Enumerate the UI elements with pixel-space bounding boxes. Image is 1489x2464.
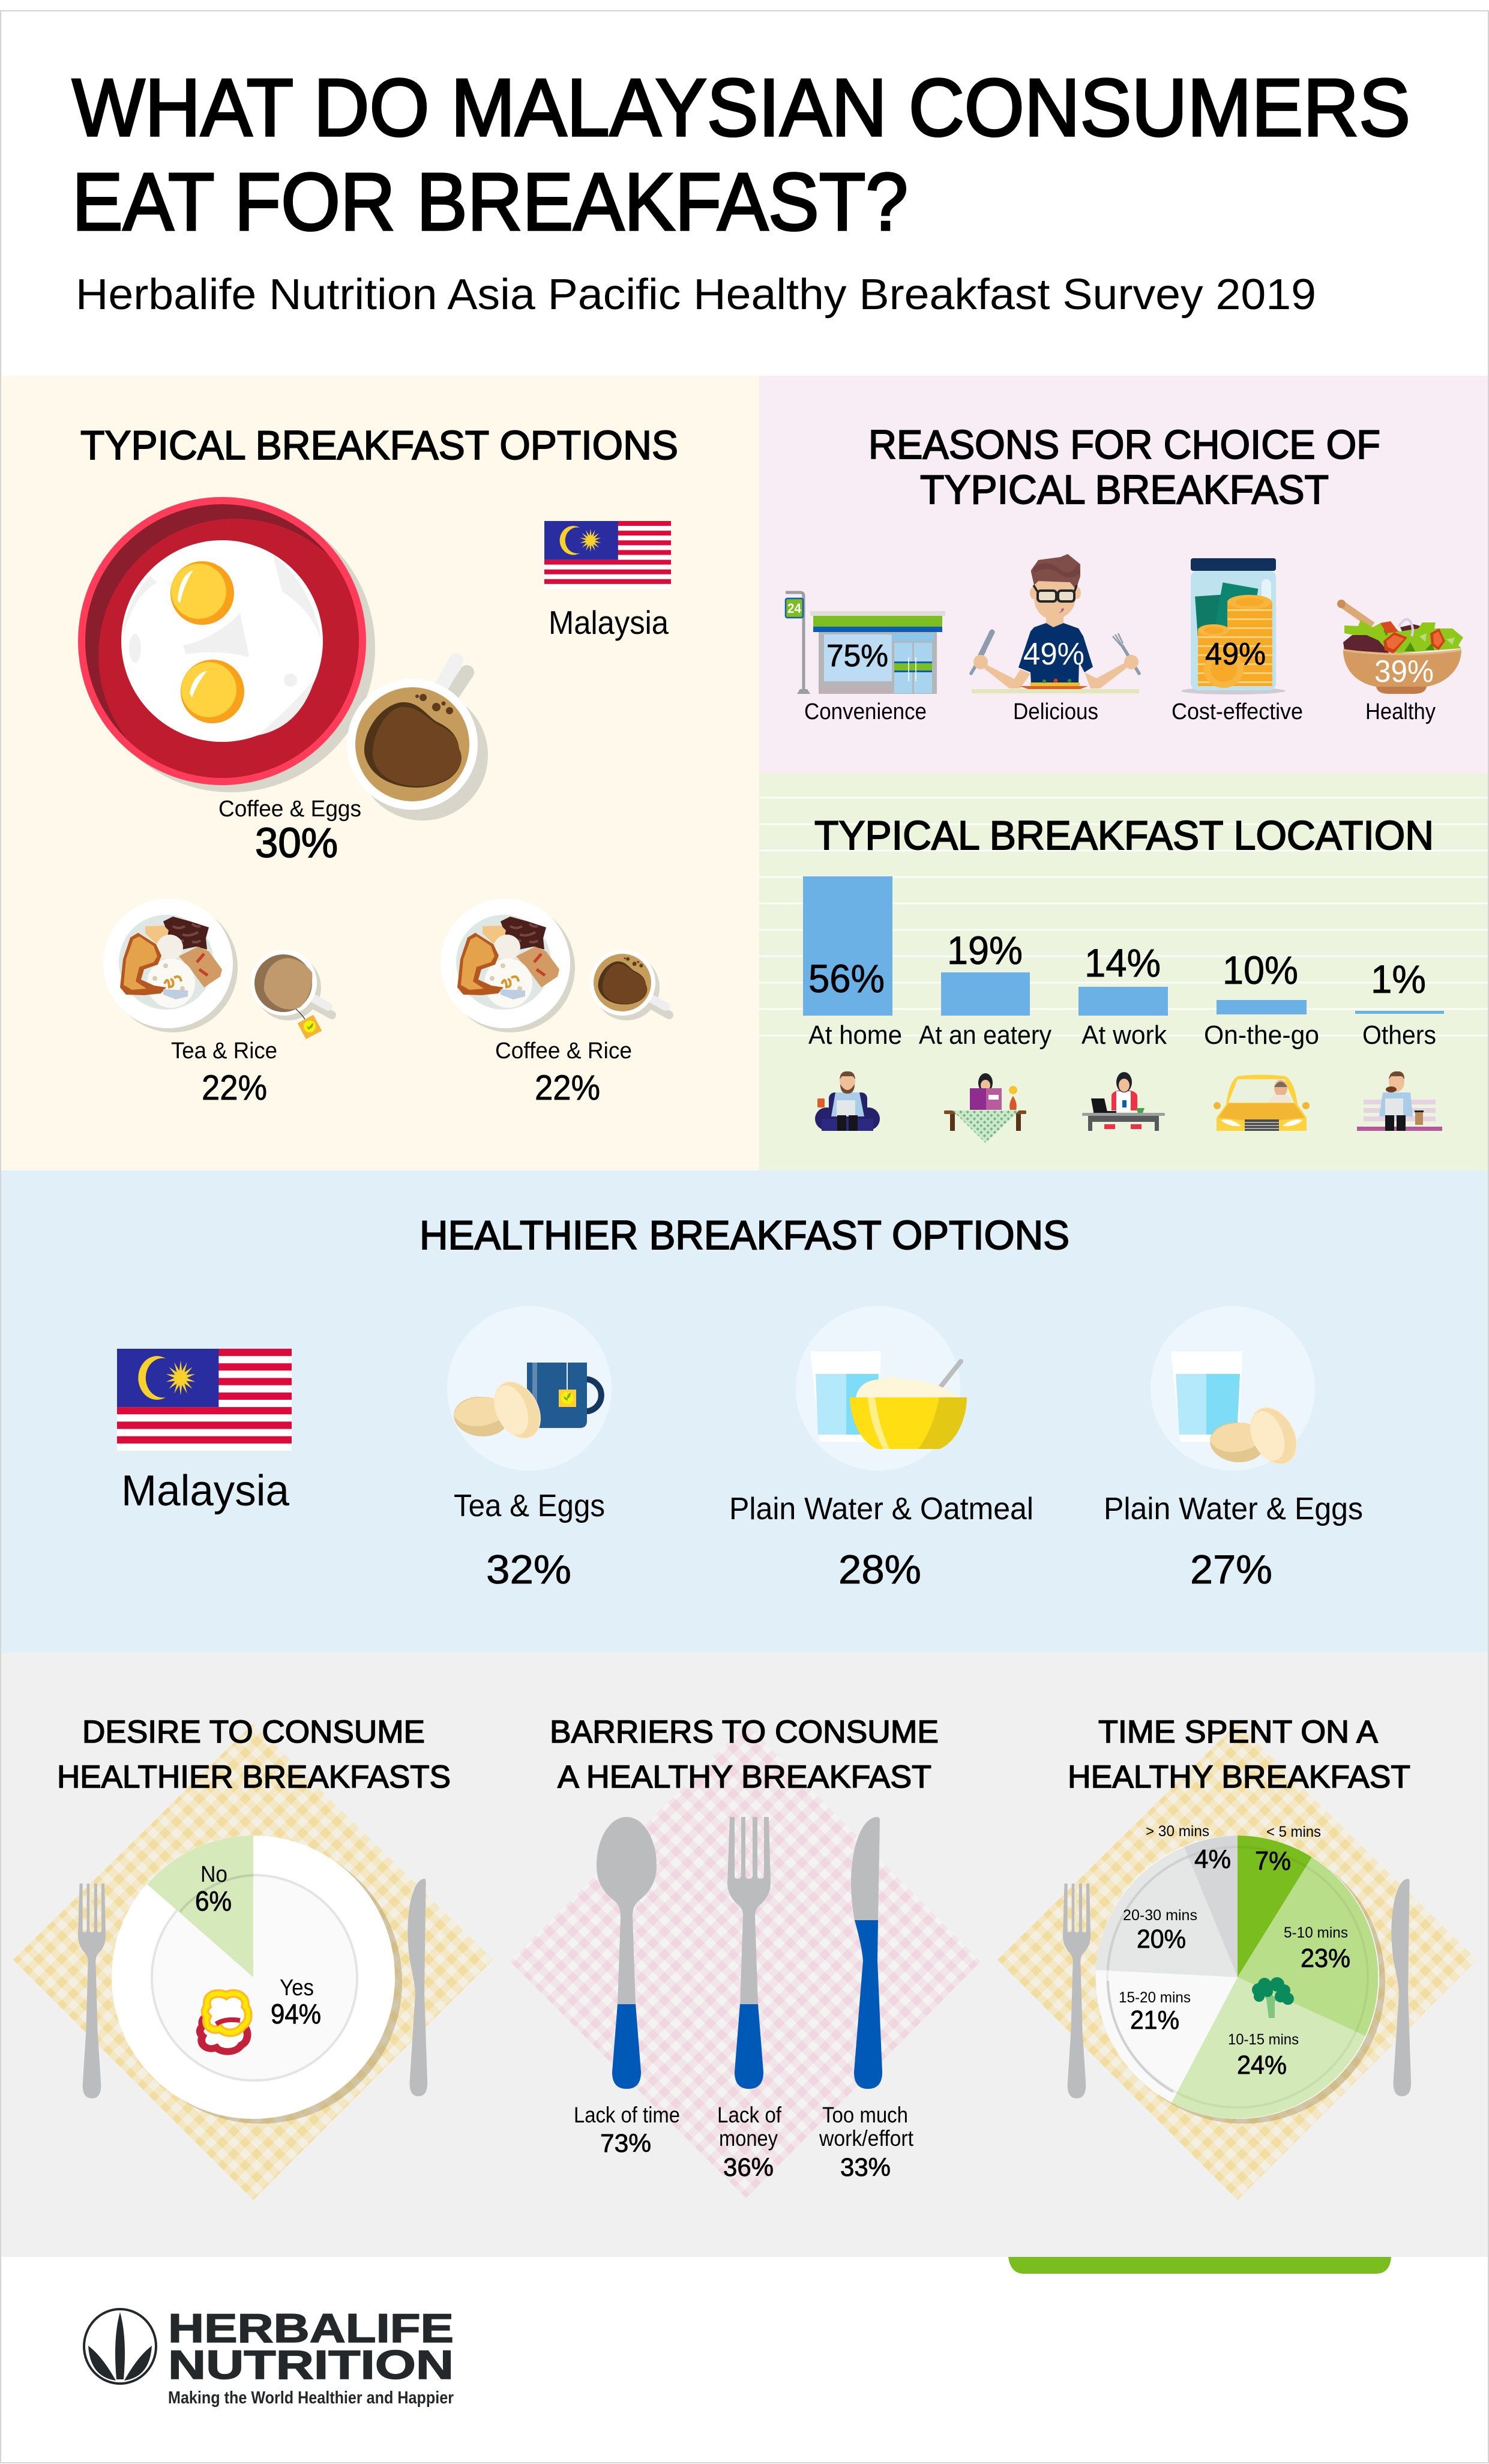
icon: plate of fried eggs (78, 497, 375, 792)
icon: convenience store: 24 (787, 601, 802, 616)
label: lack of time: Lack of time (574, 2103, 680, 2127)
label: plain water and oatmeal: Plain Water & Oatmeal (729, 1492, 1033, 1526)
bar chart: location: 1% (1371, 957, 1426, 1001)
icon: tea and eggs (447, 1306, 612, 1471)
heading: location: TYPICAL BREAKFAST LOCATION (814, 813, 1434, 858)
panel: reasons for choice (759, 376, 1488, 773)
value: tea and eggs: 32% (486, 1547, 571, 1592)
heading: barriers: BARRIERS TO CONSUME (550, 1714, 939, 1750)
heading: desire (57, 1714, 451, 1795)
panel: typical breakfast options (1, 376, 759, 1170)
pie chart: time spent: > 30 mins (1146, 1823, 1209, 1840)
pie chart: time spent: 4% (1194, 1845, 1231, 1874)
value: coffee and eggs: 30% (255, 819, 338, 866)
icon: bell pepper rings (200, 1993, 248, 2052)
icon: coffee and rice meal (441, 899, 669, 1032)
placemat: barriers (510, 1723, 981, 2198)
icon: tea and rice meal (103, 899, 332, 1039)
value: healthy: 39% (1374, 654, 1434, 689)
bar chart: location: 10% (1223, 948, 1298, 992)
label: lack of money (717, 2103, 782, 2182)
icon: knife right of plate (408, 1879, 427, 2096)
icon: coffee cup (347, 660, 488, 821)
icon: knife too much work (851, 1817, 882, 2089)
pie chart: desire yes or no: Yes (280, 1975, 314, 2001)
heading: typical breakfast options: TYPICAL BREAKFAST OPTIONS (80, 423, 678, 468)
label: too much work: Too much (822, 2103, 908, 2127)
heading: healthier options: HEALTHIER BREAKFAST OPTIONS (420, 1212, 1069, 1258)
label: Malaysia: Malaysia (549, 604, 669, 641)
label: coffee and eggs: Coffee & Eggs (218, 797, 361, 822)
icon: woman at work desk (1082, 1072, 1165, 1131)
icon: convenience store (786, 592, 945, 694)
icon: Malaysian flag (544, 521, 671, 589)
label: cost-effective: Cost-effective (1172, 699, 1303, 724)
heading: desire: HEALTHIER BREAKFASTS (57, 1759, 451, 1795)
subtitle: Herbalife Nutrition Asia Pacific Healthy Breakfast Survey 2019 (76, 271, 1316, 319)
value: delicious: 49% (1023, 637, 1084, 672)
pie chart: time spent: 20% (1137, 1924, 1186, 1954)
logo emblem (84, 2309, 156, 2384)
bar chart: location: On-the-go (1204, 1020, 1319, 1050)
icon: broccoli (1252, 1977, 1294, 2018)
heading: time spent: TIME SPENT ON A (1098, 1714, 1379, 1750)
pie chart: time spent: 20-30 mins (1123, 1907, 1197, 1924)
green tab (1008, 2257, 1391, 2274)
label: lack of money: money (719, 2126, 778, 2151)
label: plain water and eggs: Plain Water & Eggs (1104, 1492, 1363, 1526)
bar chart: location: At home (808, 1020, 902, 1050)
pie chart: desire yes or no (112, 1836, 402, 2124)
pie chart: desire yes or no: 6% (195, 1885, 232, 1917)
value: convenience: 75% (826, 639, 888, 673)
icon: jar of coins (1181, 558, 1286, 694)
pie chart: time spent: 5-10 mins (1284, 1924, 1348, 1941)
value: tea and rice: 22% (202, 1068, 267, 1107)
title: WHAT DO MALAYSIAN CONSUMERS (72, 62, 1410, 153)
value: plain water and oatmeal: 28% (838, 1547, 921, 1592)
icon: spoon lack of time (597, 1817, 657, 2089)
label: convenience: Convenience (804, 699, 927, 724)
bar chart: location: 14% (1084, 941, 1161, 985)
icon: salad bowl (1337, 600, 1463, 694)
heading: barriers: A HEALTHY BREAKFAST (558, 1759, 931, 1795)
icon: plain water and eggs (1151, 1306, 1315, 1472)
heading: time spent (1068, 1714, 1410, 1795)
label: lack of money: 36% (723, 2153, 774, 2182)
value: coffee and rice: 22% (535, 1068, 600, 1107)
bar chart: location: 56% (808, 956, 885, 1001)
label: Malaysia large: Malaysia (121, 1467, 290, 1515)
pie chart: time spent: 7% (1255, 1846, 1291, 1876)
heading: desire: DESIRE TO CONSUME (82, 1714, 425, 1750)
icon: man in armchair at home (815, 1071, 880, 1131)
icon: man on bench (1357, 1071, 1442, 1131)
pie chart: time spent (1096, 1823, 1385, 2124)
label: delicious: Delicious (1013, 699, 1098, 724)
panel: bottom section background (1, 1652, 1488, 2257)
pie chart: time spent: 15-20 mins (1119, 1989, 1191, 2006)
label: tea and eggs: Tea & Eggs (454, 1489, 605, 1523)
logo: Herbalife Nutrition: NUTRITION (168, 2342, 454, 2388)
panel: healthier breakfast options (1, 1170, 1488, 1652)
icon: driver in car (1214, 1074, 1310, 1131)
bar chart: location (803, 876, 1444, 1050)
heading: time spent: HEALTHY BREAKFAST (1068, 1759, 1410, 1795)
icon: fork lack of money (727, 1817, 771, 2089)
heading: reasons for choice: TYPICAL BREAKFAST (920, 467, 1329, 513)
label: too much work: work/effort (819, 2126, 914, 2151)
bar chart: location: 19% (947, 928, 1023, 972)
label: tea and rice: Tea & Rice (171, 1038, 277, 1064)
pie chart: desire yes or no: No (200, 1862, 227, 1887)
pie chart: time spent: 23% (1301, 1944, 1350, 1973)
icon: woman with menu at eatery (944, 1073, 1026, 1143)
icon: Malaysian flag large (117, 1349, 292, 1451)
pie chart: time spent: < 5 mins (1266, 1824, 1321, 1840)
value: cost-effective: 49% (1205, 637, 1266, 672)
bar chart: location: At work (1081, 1020, 1167, 1050)
placemat: time spent (997, 1723, 1477, 2200)
icon: fork left of pie (1063, 1884, 1090, 2098)
icon: man eating (971, 554, 1139, 693)
icon: knife right of pie (1391, 1879, 1411, 2096)
label: lack of time: 73% (600, 2129, 651, 2158)
label: too much work (819, 2103, 914, 2182)
pie chart: time spent: 24% (1237, 2050, 1287, 2080)
pie chart: desire yes or no: 94% (271, 1998, 321, 2029)
logo: Herbalife Nutrition: Making the World Healthier and Happier (168, 2388, 454, 2408)
pie chart: time spent: 10-15 mins (1228, 2031, 1299, 2048)
heading: barriers (550, 1714, 939, 1795)
logo: Herbalife Nutrition: HERBALIFE (168, 2306, 454, 2351)
title: EAT FOR BREAKFAST? (72, 156, 908, 247)
label: lack of time (574, 2103, 680, 2158)
bar chart: location: At an eatery (919, 1020, 1051, 1050)
label: lack of money: Lack of (717, 2103, 782, 2127)
bar chart: location: Others (1362, 1020, 1436, 1050)
placemat: desire (13, 1723, 493, 2200)
heading: reasons for choice: REASONS FOR CHOICE OF (868, 422, 1380, 468)
pie chart: time spent: 21% (1130, 2005, 1179, 2035)
logo: Herbalife Nutrition (84, 2306, 454, 2408)
icon: plain water and oatmeal (796, 1306, 967, 1471)
label: coffee and rice: Coffee & Rice (495, 1038, 632, 1064)
label: too much work: 33% (840, 2153, 891, 2182)
value: plain water and eggs: 27% (1190, 1547, 1272, 1592)
title (72, 62, 1410, 247)
panel: typical breakfast location (759, 773, 1488, 1170)
icon: fork left of plate (78, 1884, 106, 2098)
label: healthy: Healthy (1365, 699, 1436, 724)
heading: reasons for choice (868, 422, 1380, 513)
